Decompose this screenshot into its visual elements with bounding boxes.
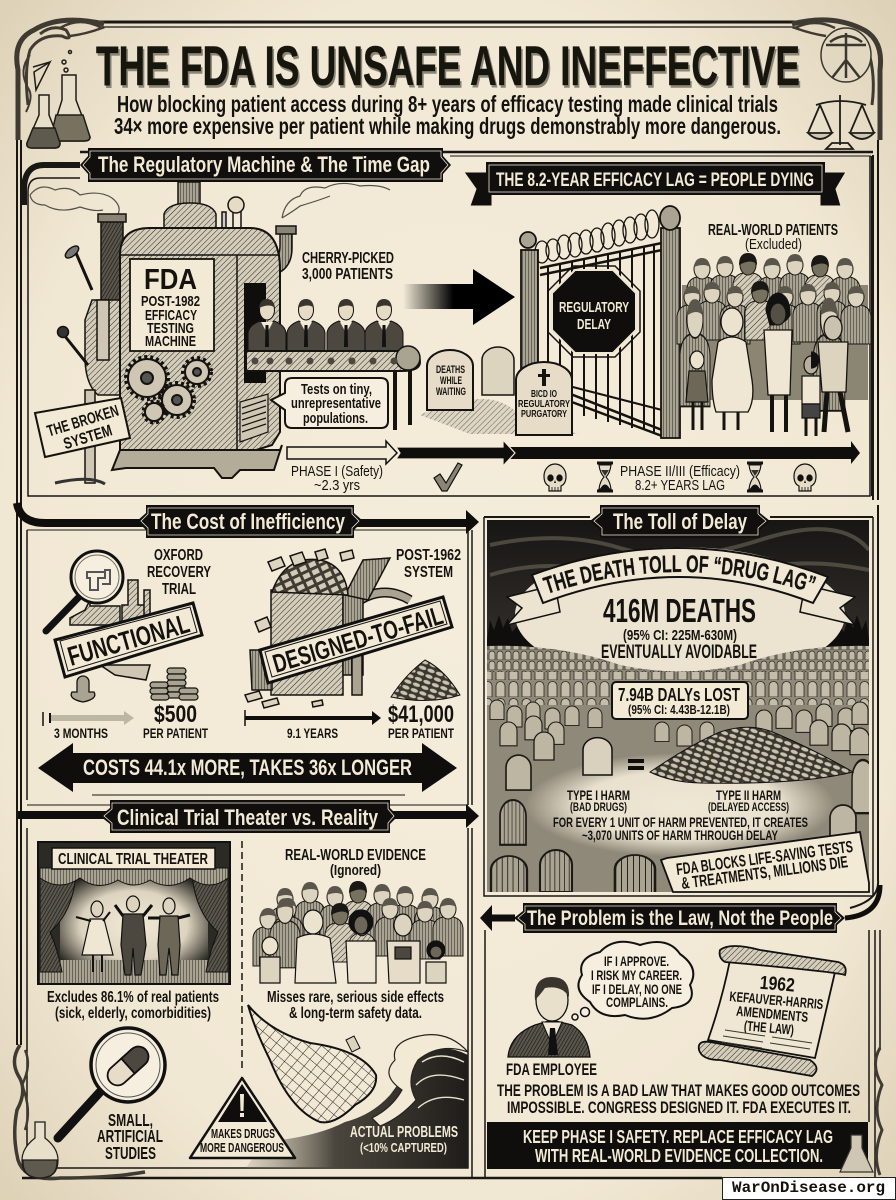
label: small artificial studies: ARTIFICIAL [97, 1126, 163, 1146]
warning triangle: MAKES DRUGS [211, 1126, 275, 1141]
icon: coin heap [391, 660, 460, 701]
pile of graves [650, 727, 853, 783]
icon: coin stack [150, 668, 198, 700]
double arrow: costs 44.1x more: COSTS 44.1x MORE, TAKES 36x LONGER [83, 755, 412, 780]
post-1962 label: SYSTEM [404, 564, 453, 581]
panel frame [484, 505, 878, 908]
theater label text: CLINICAL TRIAL THEATER [58, 851, 208, 868]
oxford recovery label: RECOVERY [147, 564, 211, 581]
section banner: regulatory machine [80, 148, 451, 182]
stage figures [76, 896, 190, 975]
mid-ground graves [490, 700, 874, 845]
thought bubble: I RISK MY CAREER. [591, 967, 682, 983]
subtitle [114, 91, 781, 139]
panel: clinical trial theater vs reality [18, 795, 479, 1178]
watermark: WarOnDisease.org [732, 1179, 885, 1197]
label: actual problems [350, 1124, 458, 1155]
section banner: cost [137, 505, 363, 538]
label: actual problems: (<10% CAPTURED) [360, 1140, 447, 1155]
icon: checkmark [434, 463, 462, 491]
top-right corner flourish [792, 20, 881, 140]
panel: cost of inefficiency [17, 503, 479, 805]
labels: type I and II harm: TYPE II HARM [716, 787, 781, 803]
section banner: toll of delay: The Toll of Delay [613, 509, 748, 534]
machine stack and dome [98, 182, 296, 308]
gears [126, 357, 211, 423]
one tombstone [583, 738, 612, 775]
steam clouds [30, 183, 390, 218]
designed-to-fail stats [245, 701, 455, 741]
stop sign: regulatory delay [548, 266, 640, 357]
machine opening [244, 283, 266, 383]
ribbon: death toll: THE DEATH TOLL OF “DRUG LAG” [542, 555, 816, 593]
sky clouds [490, 529, 869, 575]
harm ratio text [553, 814, 808, 843]
woman center [346, 910, 376, 983]
icon: laboratory flasks [27, 50, 90, 148]
section banner: theater [100, 800, 398, 833]
phase I label: PHASE I (Safety) [291, 463, 383, 480]
section banner: cost: The Cost of Inefficiency [151, 509, 346, 534]
sign: the broken system: THE BROKEN [45, 403, 121, 440]
stat: 416M deaths [601, 592, 757, 663]
cherry-picked label: 3,000 PATIENTS [302, 266, 393, 283]
functional stats: PER PATIENT [143, 726, 209, 741]
scroll: Kefauver-Harris amendments: KEFAUVER-HARRIS [729, 988, 824, 1012]
newspaper headline [661, 832, 869, 893]
icon: skull right [794, 464, 816, 491]
machine label plate: POST-1982 [141, 293, 200, 310]
label: FDA employee: FDA EMPLOYEE [506, 1060, 597, 1079]
real-world evidence label [285, 847, 426, 879]
tombstones: deaths while waiting: REGULATORY [518, 398, 570, 410]
oxford recovery label [147, 547, 211, 598]
tombstones: deaths while waiting [420, 347, 578, 435]
woman in dark hair [764, 293, 792, 432]
thought bubble [572, 942, 693, 1020]
real-world patients label: (Excluded) [745, 236, 802, 253]
conveyor belt [246, 351, 420, 371]
FDA employee figure [508, 977, 590, 1057]
sign: the broken system [35, 390, 130, 484]
tombstones: deaths while waiting: BICD IO [531, 388, 557, 400]
icon: money furnace box [245, 549, 410, 708]
stamp: functional: FUNCTIONAL [64, 608, 193, 672]
sea and wave [246, 1049, 468, 1168]
phase II/III label [620, 463, 740, 494]
designed-to-fail stats: 9.1 YEARS [287, 726, 338, 741]
warning triangle: MORE DANGEROUS [200, 1140, 284, 1155]
caption: misses side effects: Misses rare, serious side effects [267, 989, 444, 1006]
stamp: functional [55, 603, 202, 677]
functional stats: $500 [154, 701, 197, 728]
panel frame and connector arrow [18, 795, 479, 1178]
dark scene [487, 520, 874, 895]
phase II/III label: PHASE II/III (Efficacy) [620, 463, 740, 480]
machine body [120, 228, 280, 456]
real-world evidence label: REAL-WORLD EVIDENCE [285, 847, 426, 864]
double arrow: costs 44.1x more [38, 743, 457, 792]
functional stats [43, 701, 209, 741]
child right [802, 352, 820, 436]
stat: 416M deaths: (95% CI: 225M-630M) [623, 628, 737, 644]
panel frame and connector arrow [480, 885, 880, 1177]
stop sign: regulatory delay: REGULATORY [559, 299, 629, 316]
machine feet [112, 445, 282, 478]
pregnant woman [295, 910, 336, 983]
gate bars [540, 243, 662, 436]
four patients [248, 299, 403, 351]
icon: flask bottom right [840, 1135, 873, 1172]
labels: type I and II harm: TYPE I HARM [567, 787, 630, 803]
stat: 416M deaths: EVENTUALLY AVOIDABLE [601, 642, 757, 663]
stamp: designed-to-fail: DESIGNED-TO-FAIL [269, 600, 447, 679]
icon: magnifier [46, 551, 123, 631]
child left [686, 351, 708, 430]
large process arrow [403, 269, 515, 325]
functional stats: 3 MONTHS [54, 726, 108, 741]
panel frame [24, 152, 873, 496]
caption: misses side effects [267, 989, 444, 1022]
man with shirt [387, 914, 420, 983]
scroll: Kefauver-Harris amendments: (THE LAW) [743, 1017, 795, 1038]
label: small artificial studies: SMALL, [108, 1110, 153, 1130]
stat: 416M deaths: 416M DEATHS [603, 592, 756, 629]
designed-to-fail stats: PER PATIENT [388, 726, 455, 741]
top-left corner flourish [17, 20, 104, 140]
panel: toll of delay [483, 505, 880, 909]
excluded patient crowd [677, 253, 871, 436]
theater label plate [52, 848, 215, 869]
front graves [491, 850, 655, 895]
machine label plate: MACHINE [145, 333, 196, 350]
machine label plate: EFFICACY [145, 307, 197, 324]
FDA machine [58, 182, 296, 478]
side apparatus and levers [58, 244, 120, 395]
warning triangle [190, 1078, 295, 1158]
real-world crowd [253, 881, 463, 983]
cherry-picked label [302, 250, 394, 283]
post-1962 label [396, 547, 461, 581]
label: small artificial studies [97, 1110, 163, 1163]
section banner: theater: Clinical Trial Theater vs. Reality [117, 805, 378, 830]
icon: vitruvian circle [821, 28, 871, 82]
label: small artificial studies: STUDIES [105, 1143, 156, 1163]
side vent [240, 394, 268, 442]
machine label plate [130, 259, 214, 351]
tombstones: deaths while waiting: PURGATORY [521, 408, 567, 420]
post-1962 label: POST-1962 [396, 547, 461, 564]
gate posts [520, 206, 680, 438]
section banner: regulatory machine: The Regulatory Machine & The Time Gap [98, 152, 430, 177]
tombstones: deaths while waiting: WAITING [436, 386, 466, 398]
scroll: Kefauver-Harris amendments: 1962 [759, 973, 796, 997]
call to action [487, 1122, 868, 1169]
caption: excludes patients: (sick, elderly, comorbidities) [55, 1005, 211, 1022]
labels: type I and II harm: (BAD DRUGS) [570, 800, 627, 814]
machine label plate: FDA [144, 264, 197, 296]
icon: net and wave [246, 1005, 468, 1168]
oxford recovery label: TRIAL [162, 581, 196, 598]
comparison: one grave equals pile [583, 727, 853, 783]
stop sign: regulatory delay: DELAY [577, 316, 611, 333]
vignette behind harm text [525, 753, 835, 857]
divider: dashed line [241, 841, 243, 1072]
harm ratio text: ~3,070 UNITS OF HARM THROUGH DELAY [582, 827, 778, 843]
stamp: designed-to-fail [260, 597, 452, 683]
icon: magnifier over pill [58, 1028, 165, 1138]
graveyard ground [487, 646, 869, 892]
glow behind headline [515, 547, 845, 683]
oxford recovery label: OXFORD [154, 547, 203, 564]
thought bubble: COMPLAINS. [606, 994, 668, 1010]
icon: lab equipment [70, 580, 150, 680]
callout: tiny populations: unrepresentative [291, 395, 381, 412]
real-world evidence label: (Ignored) [330, 862, 381, 879]
pregnant woman [712, 308, 753, 430]
panel: regulatory machine and time gap [24, 148, 873, 496]
real-world patients label [708, 222, 838, 253]
stat: DALYs lost: 7.94B DALYs LOST [618, 684, 741, 705]
icon: small trial figure [71, 676, 95, 702]
bottom-left corner ornament [14, 1045, 145, 1179]
banner: efficacy lag [464, 162, 846, 206]
distant grave rows [487, 646, 869, 672]
caption: excludes patients [47, 989, 219, 1022]
thought bubble: IF I APPROVE. [604, 953, 669, 969]
net [248, 1005, 376, 1122]
label: actual problems: ACTUAL PROBLEMS [350, 1124, 458, 1141]
icon: round flask bottom left [22, 1122, 58, 1178]
curtains [40, 868, 228, 972]
thought bubble: IF I DELAY, NO ONE [592, 981, 682, 997]
regulatory delay gate [520, 206, 680, 438]
real-world patients label: REAL-WORLD PATIENTS [708, 222, 838, 239]
tombstones: deaths while waiting: DEATHS [436, 364, 465, 376]
labels: type I and II harm [567, 787, 789, 814]
scroll: Kefauver-Harris amendments: AMENDMENTS [736, 1003, 809, 1025]
phase I label [291, 463, 383, 494]
timeline: phase arrows [287, 440, 860, 466]
icon: scales of justice [808, 95, 874, 149]
statement: bad law [497, 1081, 860, 1117]
panel frame and connector arrow [17, 503, 479, 805]
callout: tiny populations [271, 378, 388, 428]
scroll: Kefauver-Harris amendments [699, 946, 846, 1076]
barbed wire [535, 210, 659, 263]
conveyor with four patients [246, 299, 420, 430]
child left [260, 937, 280, 983]
bottom-right corner ornament [875, 1048, 882, 1175]
ribbon: death toll [506, 547, 856, 626]
panel: problem is the law [480, 885, 880, 1177]
caption: excludes patients: Excludes 86.1% of real patients [47, 989, 219, 1006]
theater illustration [38, 842, 230, 984]
phase I label: ~2.3 yrs [314, 477, 360, 494]
stat: DALYs lost [612, 682, 748, 719]
callout: tiny populations: populations. [303, 410, 368, 427]
man at right [818, 316, 848, 432]
icon: skull left [544, 464, 566, 491]
icon: hourglass right [747, 463, 763, 491]
phase II/III label: 8.2+ YEARS LAG [635, 477, 725, 494]
tree line [487, 616, 869, 647]
cherry-picked label: CHERRY-PICKED [302, 250, 394, 267]
machine label plate: TESTING [147, 320, 194, 337]
sign: the broken system: SYSTEM [62, 422, 114, 453]
designed-to-fail stats: $41,000 [388, 701, 454, 728]
caption: misses side effects: & long-term safety data. [289, 1005, 422, 1022]
section banner: law [514, 903, 845, 933]
tombstones: deaths while waiting: WHILE [440, 375, 462, 387]
callout: tiny populations: Tests on tiny, [301, 381, 372, 398]
stat: DALYs lost: (95% CI: 4.43B-12.1B) [628, 703, 730, 717]
child right [426, 941, 446, 983]
section banner: toll of delay [590, 505, 770, 538]
labels: type I and II harm: (DELAYED ACCESS) [708, 800, 789, 814]
icon: hourglass left [597, 463, 613, 491]
equals sign [628, 759, 644, 770]
